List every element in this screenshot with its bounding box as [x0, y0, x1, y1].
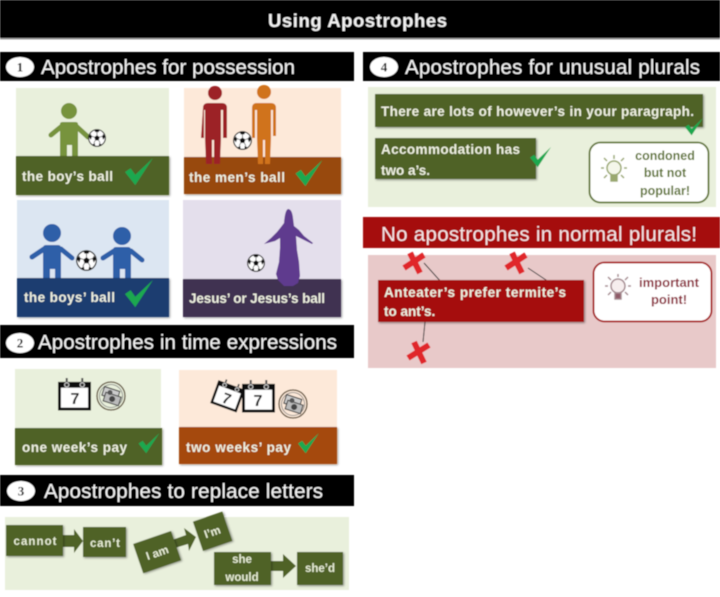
- section 2 heading: [0, 325, 354, 358]
- example bar: [378, 280, 584, 322]
- section 1 heading: [0, 52, 354, 81]
- panel: the boys' ball: [17, 200, 169, 317]
- word: she'd: she’d: [305, 563, 335, 575]
- example bar 1: [375, 94, 703, 127]
- section 4 heading: [363, 52, 720, 81]
- label bar: [184, 157, 341, 194]
- word: can't: [83, 527, 126, 557]
- arrow: [270, 554, 296, 578]
- word: cannot: [6, 525, 63, 556]
- icon: calendar tilted: [210, 377, 246, 412]
- section 3 heading: Apostrophes to replace letters: [44, 480, 323, 503]
- section 3 heading: 3: [18, 484, 25, 498]
- icon: boy left: [32, 224, 72, 280]
- example bar 2: Accommodation has: [381, 142, 520, 157]
- warning heading: [363, 217, 720, 248]
- section 4 heading: 4: [381, 60, 388, 74]
- icon: robed figure: [264, 209, 313, 286]
- panel: normal plurals: [368, 253, 716, 368]
- word: I'm: [193, 512, 232, 551]
- section 2 heading: Apostrophes in time expressions: [38, 331, 337, 354]
- label bar: [15, 428, 162, 465]
- panel: one week's pay: one week’s pay: [22, 440, 127, 455]
- icon: check: [685, 118, 703, 135]
- example bar: to ant’s.: [384, 304, 435, 319]
- icon: man red: [201, 86, 227, 164]
- panel: the boys' ball: the boys’ ball: [24, 290, 115, 305]
- icon: lightbulb: [605, 274, 631, 299]
- callout: condoned: [590, 142, 708, 202]
- title: [0, 0, 720, 40]
- icon: football: [248, 255, 264, 271]
- label bar: [16, 156, 169, 195]
- icon: calendar: [242, 380, 275, 411]
- icon: football: [77, 251, 96, 270]
- word: I am: I am: [145, 544, 170, 563]
- word: I'm: I’m: [203, 525, 222, 541]
- icon: football: [234, 132, 251, 149]
- icon: check: [138, 433, 160, 453]
- section 1 heading: 1: [17, 60, 23, 74]
- panel: the men's ball: [184, 85, 341, 194]
- panel: contractions: [5, 512, 349, 590]
- icon: boy right: [103, 227, 142, 280]
- label bar: [183, 279, 341, 317]
- warning heading: No apostrophes in normal plurals!: [381, 223, 697, 246]
- panel: two weeks' pay: [179, 370, 337, 464]
- word: cannot: cannot: [14, 536, 57, 548]
- panel: two weeks' pay: two weeks’ pay: [186, 440, 291, 455]
- section 2 heading: 2: [17, 336, 23, 350]
- panel: the boy's ball: the boy’s ball: [22, 169, 113, 184]
- icon: check: [296, 160, 322, 186]
- icon: money: [279, 390, 307, 418]
- icon: calendar: 7: [254, 393, 263, 410]
- icon: cross: [404, 253, 424, 273]
- section 4 heading: Apostrophes for unusual plurals: [405, 56, 700, 79]
- arrow: [62, 529, 83, 553]
- arrow: [172, 528, 196, 551]
- title: Using Apostrophes: [268, 10, 447, 31]
- icon: football: [89, 130, 105, 146]
- example bar 1: There are lots of however’s in your paragraph.: [381, 104, 694, 119]
- icon: cross: [408, 342, 429, 363]
- icon: check: [530, 147, 551, 167]
- icon: calendar: [58, 378, 91, 409]
- panel: one week's pay: [15, 369, 162, 465]
- word: can't: can’t: [90, 538, 120, 550]
- panel: the men's ball: the men’s ball: [189, 170, 285, 185]
- icon: check: [125, 158, 153, 185]
- panel: Jesus' ball: [183, 200, 341, 317]
- icon: lightbulb: [601, 155, 627, 181]
- word: she would: [214, 552, 271, 585]
- icon: calendar tilted: 7: [220, 390, 233, 409]
- callout: condoned: popular!: [640, 184, 690, 198]
- icon: man orange: [252, 85, 276, 164]
- callout: important point: [594, 262, 712, 322]
- panel: unusual plurals: [368, 87, 716, 207]
- callout: important point: important: [639, 275, 700, 290]
- icon: calendar: 7: [71, 391, 80, 408]
- label bar: [17, 278, 169, 317]
- icon: check: [298, 433, 319, 453]
- connector lines: [423, 263, 552, 342]
- section 1 heading: Apostrophes for possession: [41, 56, 295, 79]
- section 3 heading: [0, 475, 354, 506]
- panel: the boy's ball: [16, 88, 169, 195]
- label bar: [179, 427, 337, 464]
- icon: check: [125, 280, 153, 307]
- icon: boy: [51, 103, 88, 158]
- example bar 2: [375, 138, 536, 179]
- panel: Jesus' ball: Jesus’ or Jesus’s ball: [189, 291, 325, 306]
- word: she would: would: [224, 572, 259, 584]
- icon: money: [97, 382, 125, 410]
- word: I am: [133, 531, 181, 573]
- word: she'd: [297, 552, 343, 585]
- callout: condoned: but not: [644, 166, 687, 180]
- icon: cross: [506, 253, 526, 273]
- example bar: Anteater’s prefer termite’s: [384, 285, 566, 300]
- word: she would: she: [232, 554, 252, 566]
- callout: important point: point!: [651, 292, 687, 307]
- example bar 2: two a’s.: [381, 163, 430, 178]
- callout: condoned: condoned: [635, 149, 695, 163]
